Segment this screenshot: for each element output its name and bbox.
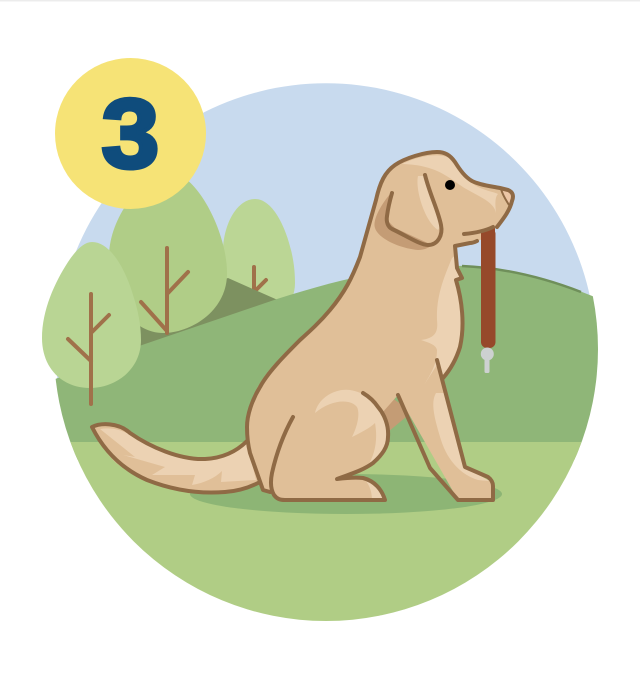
dog paw highlight — [363, 478, 385, 500]
dog haunch highlight — [315, 390, 388, 467]
dog hind leg outline — [271, 393, 388, 500]
dog belly shade — [378, 388, 412, 432]
far dark hill — [120, 278, 300, 360]
dog head highlight — [402, 155, 498, 213]
sky — [56, 83, 596, 464]
dog mouth — [464, 227, 493, 234]
dog nose — [501, 190, 512, 204]
tree: back right — [223, 199, 295, 321]
tail — [92, 424, 258, 493]
dog ear highlight — [417, 176, 441, 230]
dog ear shadow — [374, 193, 432, 250]
dog nose outline — [501, 189, 509, 205]
ground — [70, 442, 582, 621]
dog ear outline — [387, 175, 441, 245]
number badge — [55, 58, 206, 209]
dog front leg outline — [398, 360, 493, 500]
tree: front left — [42, 242, 141, 404]
dog body — [247, 152, 513, 500]
dog chest highlight — [421, 255, 462, 385]
leash — [481, 228, 496, 373]
tree: middle — [109, 173, 227, 333]
leash in mouth — [481, 228, 495, 245]
number 3: 3 — [102, 80, 159, 189]
dog front leg — [398, 350, 493, 500]
dog — [92, 152, 513, 500]
hill and ground — [56, 264, 598, 621]
leash clip — [481, 348, 494, 373]
dog eye — [445, 180, 455, 190]
background scene circle — [56, 83, 598, 621]
dog leg highlight — [433, 393, 493, 483]
dog outline — [247, 152, 513, 492]
hill — [40, 266, 600, 460]
ground shadow — [190, 474, 502, 514]
